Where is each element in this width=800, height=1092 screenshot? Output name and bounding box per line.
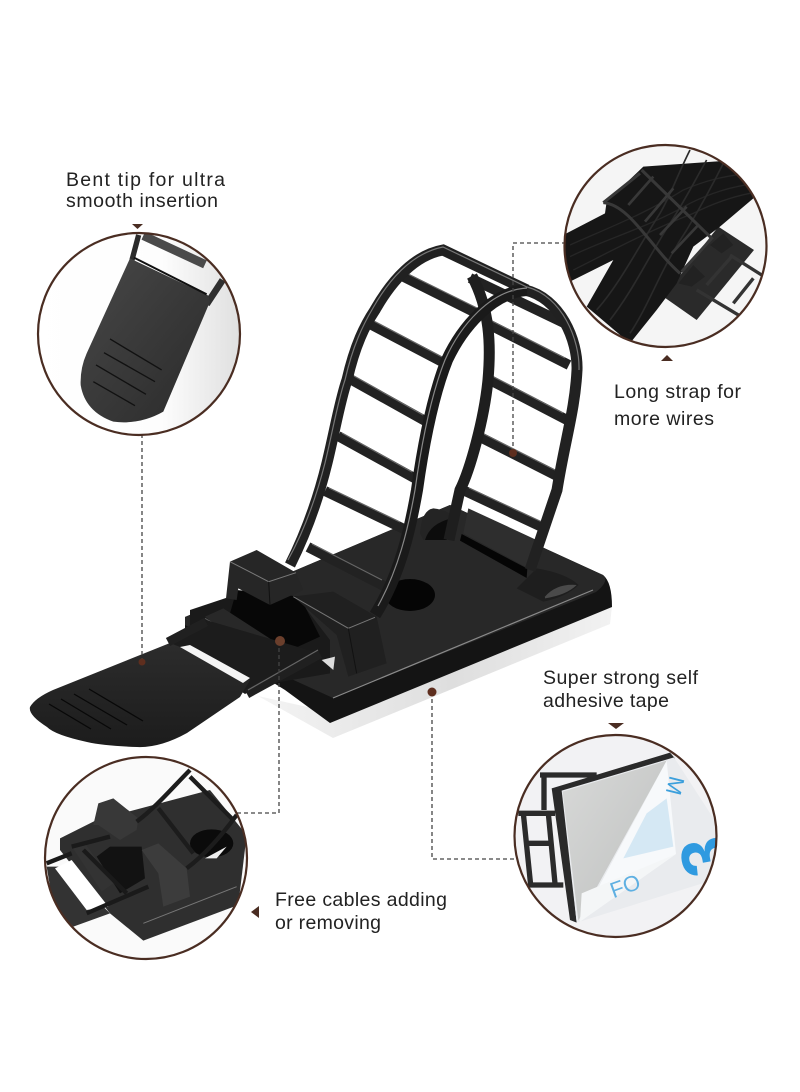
marker dot <box>138 658 146 666</box>
circle contents <box>566 146 765 346</box>
rear slot and bosses <box>420 503 579 602</box>
connector: free cables <box>237 636 285 813</box>
leader line <box>237 641 279 813</box>
leader line <box>432 692 516 859</box>
circle contents <box>80 234 239 425</box>
circle contents <box>516 736 716 936</box>
label: free cables: Free cables adding <box>275 889 447 911</box>
clip housing and buckle <box>190 550 387 687</box>
label: bent tip: smooth insertion <box>66 190 218 212</box>
rung highlights <box>312 271 565 580</box>
pointer triangle: free cables <box>251 906 259 918</box>
main product: cable clip <box>30 247 612 747</box>
circle border <box>45 757 247 959</box>
inner strap frame behind paddle <box>168 620 322 694</box>
paddle grooves <box>49 689 143 729</box>
label: bent tip: Bent tip for ultra <box>66 169 225 191</box>
circle contents: FO <box>606 869 644 903</box>
right outer rail <box>525 290 577 570</box>
paddle rails <box>168 622 320 694</box>
adhesive tape under base <box>258 606 612 738</box>
circle border <box>514 735 716 937</box>
rail highlights <box>288 247 579 560</box>
strap paddle tip <box>30 643 250 747</box>
label: long strap: Long strap for <box>614 381 742 403</box>
paddle white slot <box>180 645 250 683</box>
base plate side <box>185 505 612 723</box>
label: free cables: or removing <box>275 912 381 934</box>
base plate top <box>185 505 605 698</box>
circle border <box>564 145 766 347</box>
connector: long strap <box>509 243 565 457</box>
circle border <box>38 233 240 435</box>
label: adhesive tape: adhesive tape <box>543 690 669 712</box>
circle contents: M <box>661 774 689 798</box>
rear right rail <box>449 276 489 540</box>
circle contents: 3 <box>665 831 748 883</box>
label: long strap: more wires <box>614 408 714 430</box>
front arc rail <box>375 290 527 615</box>
connector: bent tip <box>138 434 146 666</box>
left outer rail <box>290 250 527 565</box>
leader line <box>513 243 565 453</box>
label: adhesive tape: Super strong self <box>543 667 699 689</box>
pointer triangle: adhesive tape <box>608 723 624 729</box>
detail circle: cable release buckle <box>40 750 255 965</box>
mounting hole <box>385 579 435 611</box>
marker dot <box>509 449 517 457</box>
pointer triangle: long strap <box>661 355 673 361</box>
circle contents <box>46 768 246 941</box>
detail circle: bent tip <box>36 232 242 436</box>
base front edge highlight <box>333 590 593 698</box>
marker dot <box>428 688 436 696</box>
marker dot <box>275 636 285 646</box>
strap rungs <box>308 274 569 587</box>
connector: adhesive tape <box>428 688 516 859</box>
leader line <box>141 434 143 662</box>
pointer triangle: bent tip <box>132 224 143 229</box>
detail circle: adhesive backing <box>513 734 718 938</box>
rail highlight <box>248 650 318 690</box>
ladder strap <box>288 247 579 615</box>
detail circle: long strap with cables <box>560 140 775 355</box>
infographic canvas <box>30 144 768 960</box>
